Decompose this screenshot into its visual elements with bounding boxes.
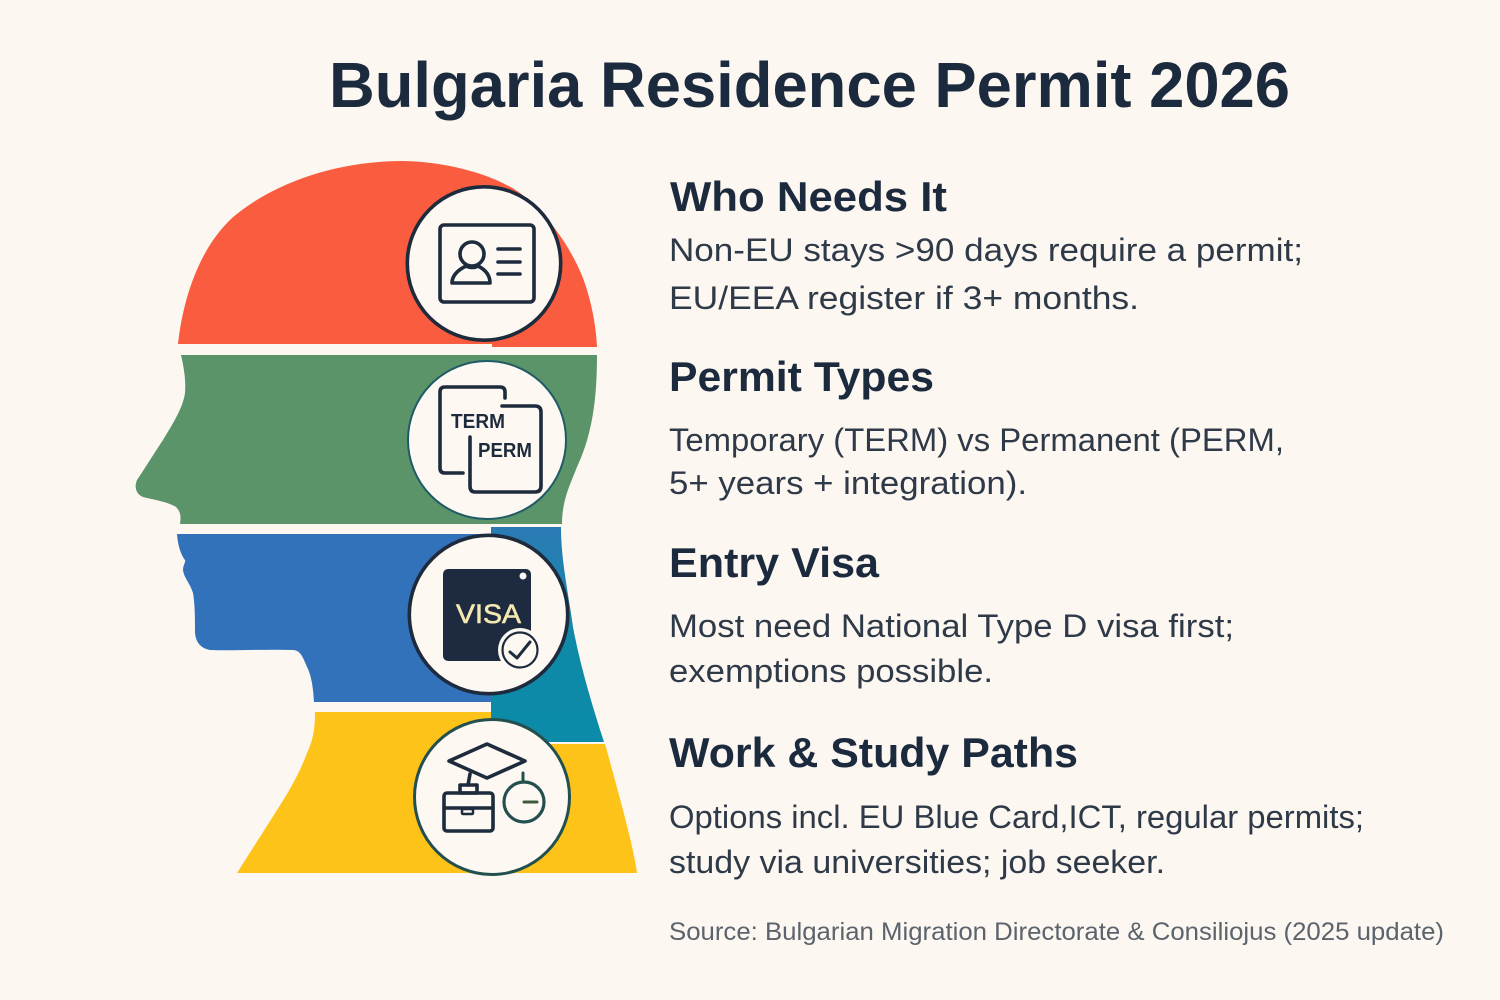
body text: Non-EU stays >90 days require a permit; [669,232,1303,268]
body text: Temporary (TERM) vs Permanent (PERM, [669,422,1284,458]
section: entry visa [669,539,1234,689]
heading: Work & Study Paths [669,729,1078,776]
head silhouette [136,161,637,873]
body text: EU/EEA register if 3+ months. [669,280,1139,316]
icon: visa card with check [409,535,568,694]
heading: Permit Types [669,353,934,400]
body text: Options incl. EU Blue Card,ICT, regular permits; [669,799,1364,835]
body text: study via universities; job seeker. [669,844,1165,880]
body text: exemptions possible. [669,653,993,689]
title: Bulgaria Residence Permit 2026 [329,49,1290,121]
icon: TERM and PERM documents: PERM [478,440,532,462]
icon: graduation cap, briefcase and clock [414,720,570,874]
body text [669,799,1364,880]
heading: Entry Visa [669,539,880,586]
icon: ID card [407,187,561,340]
icon: visa card with check: VISA [456,599,521,629]
head segment: yellow shoulders [237,712,637,873]
body text [669,232,1303,316]
icon: TERM and PERM documents: TERM [451,411,505,433]
section: who needs it [669,173,1303,316]
body text: Most need National Type D visa first; [669,608,1234,644]
head segment: teal neck back [491,527,604,742]
body text: 5+ years + integration). [669,465,1027,501]
head segment: blue jaw [177,534,491,702]
source note: Source: Bulgarian Migration Directorate & Consiliojus (2025 update) [669,918,1444,946]
body text [669,608,1234,689]
heading: Who Needs It [670,173,947,220]
head segment: green face [136,355,597,524]
head segment: red crown [178,161,597,347]
section: permit types [669,353,1284,501]
icon: TERM and PERM documents [408,361,566,519]
body text [669,422,1284,501]
section: work and study paths [669,729,1364,880]
